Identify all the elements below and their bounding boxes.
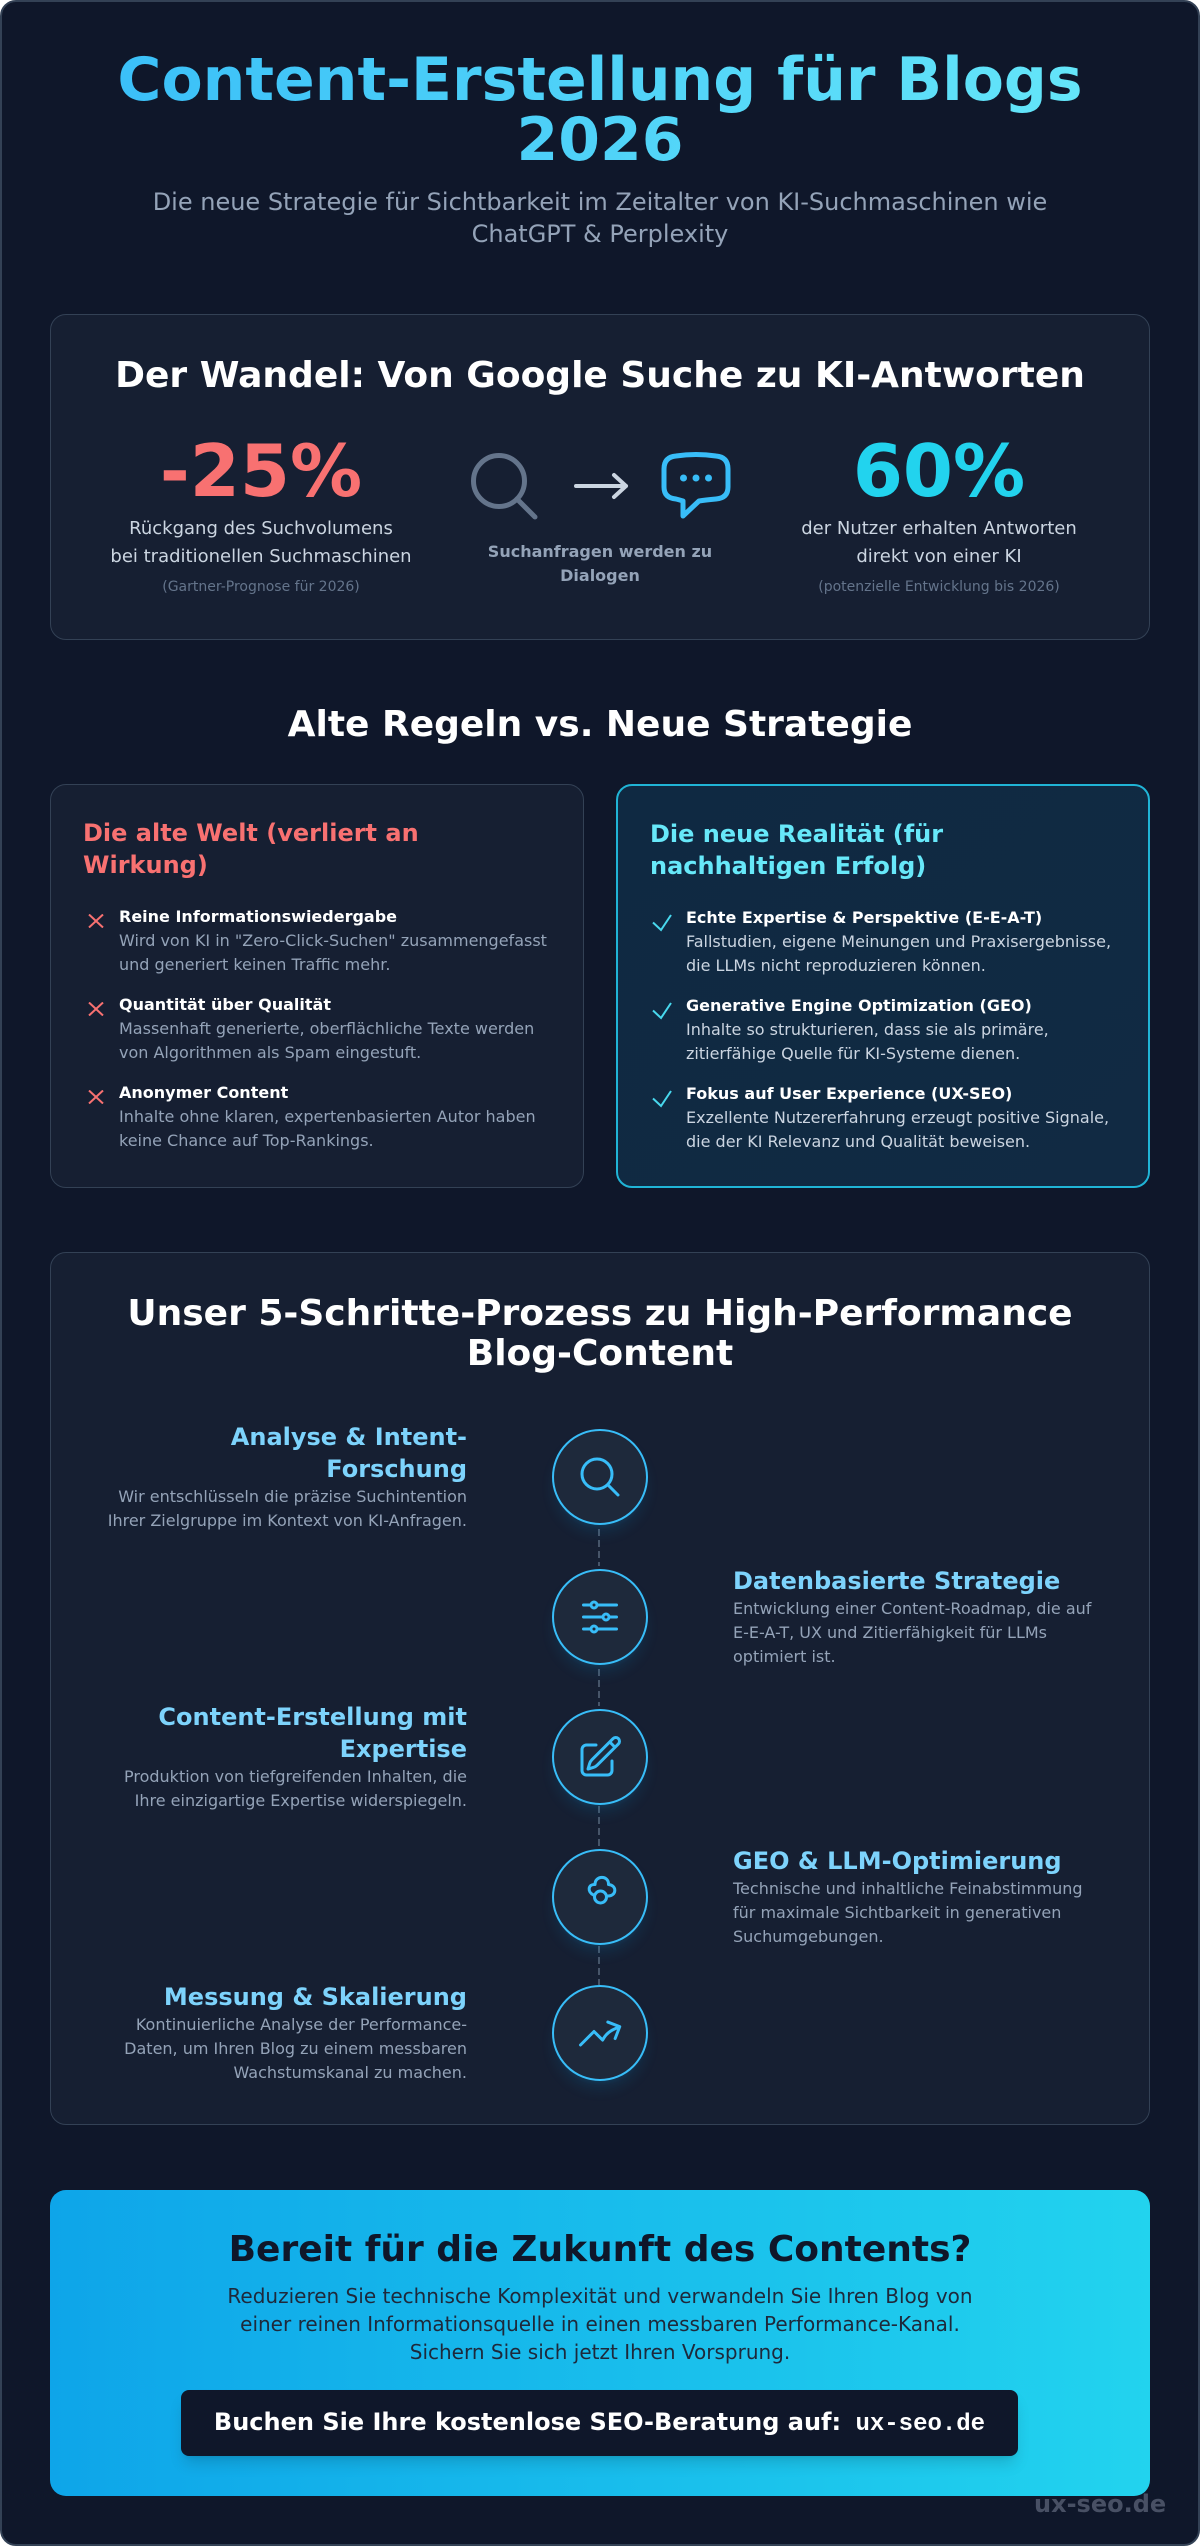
item: old 3: Anonymer Content bbox=[119, 1083, 288, 1102]
icon: check 3 bbox=[652, 1090, 672, 1108]
cta button: Buchen Sie Ihre kostenlose SEO-Beratung auf: ux-seo.de bbox=[214, 2408, 985, 2438]
icon: step 4 cloud bbox=[552, 1849, 648, 1945]
panel: new reality bbox=[616, 784, 1150, 1188]
watermark: ux-seo.de bbox=[1034, 2490, 1166, 2518]
step 1 description: Ihrer Zielgruppe im Kontext von KI-Anfragen. bbox=[108, 1511, 467, 1530]
cta text: Reduzieren Sie technische Komplexität und verwandeln Sie Ihren Blog von bbox=[227, 2284, 973, 2308]
item: old 1: und generiert keinen Traffic mehr. bbox=[119, 955, 390, 974]
stat description: bei traditionellen Suchmaschinen bbox=[110, 546, 412, 567]
item: new 1 bbox=[686, 908, 1111, 975]
step 1 title bbox=[230, 1423, 467, 1483]
step 1 description bbox=[108, 1487, 467, 1530]
step 4 title: GEO & LLM-Optimierung bbox=[733, 1847, 1062, 1875]
cta heading: Bereit für die Zukunft des Contents? bbox=[229, 2229, 971, 2270]
step 4 description: Technische und inhaltliche Feinabstimmung bbox=[733, 1879, 1083, 1898]
item: old 3: Inhalte ohne klaren, expertenbasierten Autor haben bbox=[119, 1107, 536, 1126]
stat description bbox=[801, 518, 1077, 567]
item: old 2: Massenhaft generierte, oberflächliche Texte werden bbox=[119, 1019, 534, 1038]
step 3 title bbox=[158, 1703, 467, 1763]
item: old 1 bbox=[119, 907, 547, 974]
stat description: Rückgang des Suchvolumens bbox=[129, 518, 393, 539]
subtitle: Die neue Strategie für Sichtbarkeit im Zeitalter von KI-Suchmaschinen wie bbox=[153, 188, 1047, 216]
item: new 3: Fokus auf User Experience (UX-SEO) bbox=[686, 1084, 1012, 1103]
heading: new reality: nachhaltigen Erfolg) bbox=[650, 852, 926, 880]
step 5 description: Wachstumskanal zu machen. bbox=[234, 2063, 467, 2082]
icon: x 3 bbox=[88, 1090, 104, 1104]
step 1 text bbox=[108, 1423, 467, 1530]
item: new 2 bbox=[686, 996, 1049, 1063]
step 2 title: Datenbasierte Strategie bbox=[733, 1567, 1060, 1595]
subtitle bbox=[153, 188, 1047, 248]
heading: old vs new: Alte Regeln vs. Neue Strategie bbox=[288, 704, 912, 745]
item: old 2 bbox=[119, 995, 534, 1062]
heading: new reality bbox=[650, 820, 944, 880]
caption: search becomes dialogue: Suchanfragen werden zu bbox=[488, 542, 712, 561]
step 5 description: Kontinuierliche Analyse der Performance- bbox=[136, 2015, 467, 2034]
icon: check 1 bbox=[652, 914, 672, 932]
step 4 description: Suchumgebungen. bbox=[733, 1927, 884, 1946]
timeline connector bbox=[598, 1529, 600, 1985]
icon: step 5 trend bbox=[552, 1985, 648, 2081]
step 3 text bbox=[124, 1703, 467, 1810]
panel: der Wandel bbox=[50, 314, 1150, 640]
step 5 description bbox=[124, 2015, 467, 2082]
heading: process bbox=[127, 1293, 1073, 1374]
step 1 description: Wir entschlüsseln die präzise Suchintention bbox=[118, 1487, 467, 1506]
stat source: (Gartner-Prognose für 2026) bbox=[162, 579, 360, 595]
step 5 text bbox=[124, 1983, 467, 2082]
step 3 title: Content-Erstellung mit bbox=[158, 1703, 467, 1731]
item: new 2: Inhalte so strukturieren, dass sie als primäre, bbox=[686, 1020, 1049, 1039]
stat value: 60% bbox=[853, 429, 1025, 513]
icon: step 1 search bbox=[552, 1429, 648, 1525]
step 3 description bbox=[124, 1767, 467, 1810]
title bbox=[50, 50, 1150, 170]
step 5 title: Messung & Skalierung bbox=[164, 1983, 467, 2011]
step 4 text bbox=[732, 1847, 1083, 1946]
stat source: (potenzielle Entwicklung bis 2026) bbox=[818, 579, 1060, 595]
step 2 text bbox=[733, 1567, 1092, 1666]
cta text bbox=[227, 2284, 973, 2364]
panel: process bbox=[50, 1252, 1150, 2125]
icon: step 3 pencil bbox=[552, 1709, 648, 1805]
cta text: Sichern Sie sich jetzt Ihren Vorsprung. bbox=[410, 2340, 790, 2364]
heading: process: Unser 5-Schritte-Prozess zu High-Performance bbox=[127, 1293, 1073, 1334]
step 1 title: Analyse & Intent- bbox=[231, 1423, 467, 1451]
heading: der Wandel: Der Wandel: Von Google Suche zu KI-Antworten bbox=[115, 355, 1085, 396]
stat value: -25% bbox=[160, 429, 362, 513]
step 2 description: optimiert ist. bbox=[733, 1647, 836, 1666]
heading: old world: Wirkung) bbox=[83, 851, 208, 879]
stat description: der Nutzer erhalten Antworten bbox=[801, 518, 1077, 539]
item: old 1: Wird von KI in "Zero-Click-Suchen" zusammengefasst bbox=[119, 931, 547, 950]
step 2 description bbox=[733, 1599, 1092, 1666]
cta text: einer reinen Informationsquelle in einen messbaren Performance-Kanal. bbox=[240, 2312, 960, 2336]
cta button bbox=[181, 2390, 1018, 2456]
panel: old world bbox=[50, 784, 584, 1188]
step 1 title: Forschung bbox=[326, 1455, 467, 1483]
step 4 description: für maximale Sichtbarkeit in generativen bbox=[733, 1903, 1061, 1922]
step 5 description: Daten, um Ihren Blog zu einem messbaren bbox=[124, 2039, 467, 2058]
stat: 60 percent bbox=[801, 429, 1077, 595]
title: Content-Erstellung für Blogs bbox=[117, 45, 1083, 115]
stat description bbox=[110, 518, 412, 567]
step 3 description: Produktion von tiefgreifenden Inhalten, die bbox=[124, 1767, 467, 1786]
icon: step 2 sliders bbox=[552, 1569, 648, 1665]
item: new 1: Echte Expertise & Perspektive (E-E-A-T) bbox=[686, 908, 1042, 927]
step 2 description: E-E-A-T, UX und Zitierfähigkeit für LLMs bbox=[733, 1623, 1047, 1642]
heading: process: Blog-Content bbox=[467, 1333, 733, 1374]
icon: x 1 bbox=[88, 914, 104, 928]
stat: minus 25 percent bbox=[110, 429, 412, 595]
heading: old world bbox=[83, 819, 419, 879]
stat description: direkt von einer KI bbox=[856, 546, 1022, 567]
subtitle: ChatGPT & Perplexity bbox=[472, 220, 728, 248]
item: old 2: Quantität über Qualität bbox=[119, 995, 331, 1014]
item: new 2: zitierfähige Quelle für KI-Systeme dienen. bbox=[686, 1044, 1020, 1063]
header bbox=[117, 45, 1083, 248]
item: new 3 bbox=[686, 1084, 1109, 1151]
item: old 3: keine Chance auf Top-Rankings. bbox=[119, 1131, 374, 1150]
item: old 1: Reine Informationswiedergabe bbox=[119, 907, 397, 926]
item: new 1: Fallstudien, eigene Meinungen und Praxisergebnisse, bbox=[686, 932, 1111, 951]
step 2 description: Entwicklung einer Content-Roadmap, die auf bbox=[733, 1599, 1091, 1618]
item: new 3: Exzellente Nutzererfahrung erzeugt positive Signale, bbox=[686, 1108, 1109, 1127]
item: new 1: die LLMs nicht reproduzieren können. bbox=[686, 956, 986, 975]
item: old 3 bbox=[119, 1083, 536, 1150]
icon: x 2 bbox=[88, 1002, 104, 1016]
icon: search to chat transition bbox=[471, 452, 730, 520]
caption: search becomes dialogue: Dialogen bbox=[560, 566, 640, 585]
item: old 2: von Algorithmen als Spam eingestuft. bbox=[119, 1043, 421, 1062]
heading: old world: Die alte Welt (verliert an bbox=[83, 819, 419, 847]
icon: check 2 bbox=[652, 1002, 672, 1020]
item: new 3: die der KI Relevanz und Qualität beweisen. bbox=[686, 1132, 1030, 1151]
title: 2026 bbox=[516, 105, 684, 175]
step 4 description bbox=[732, 1879, 1083, 1946]
caption: search becomes dialogue bbox=[488, 542, 712, 585]
step 3 description: Ihre einzigartige Expertise widerspiegeln. bbox=[135, 1791, 467, 1810]
heading: new reality: Die neue Realität (für bbox=[650, 820, 943, 848]
step 3 title: Expertise bbox=[340, 1735, 467, 1763]
item: new 2: Generative Engine Optimization (GEO) bbox=[686, 996, 1032, 1015]
panel: call to action bbox=[50, 2190, 1150, 2496]
